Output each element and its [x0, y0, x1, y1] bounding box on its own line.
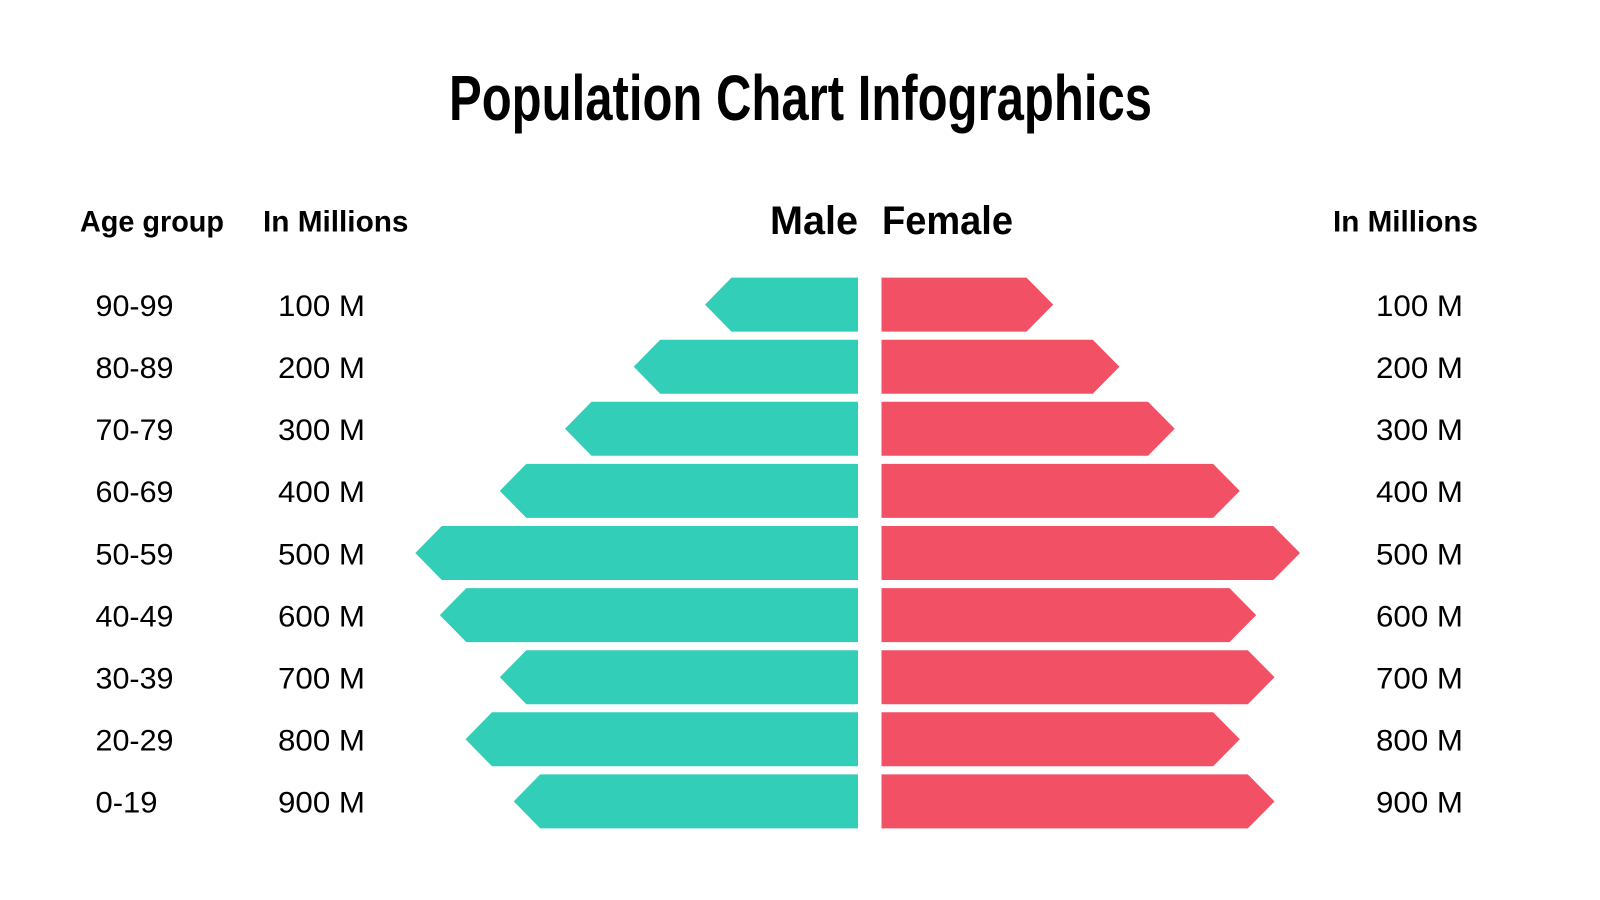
female values in millions: 700 M: [1376, 662, 1463, 696]
heading: male in millions: In Millions: [263, 206, 408, 238]
age group labels: 90-99: [96, 290, 174, 323]
female values in millions: 300 M: [1376, 414, 1463, 447]
heading: age group: Age group: [80, 206, 224, 238]
column headers: [80, 199, 1478, 243]
male values in millions: 600 M: [278, 600, 365, 634]
male values in millions: 500 M: [278, 538, 365, 572]
female values in millions: [1376, 290, 1463, 820]
male values in millions: 100 M: [278, 290, 365, 323]
male values in millions: 800 M: [278, 724, 365, 758]
age group labels: 80-89: [96, 352, 174, 385]
female values in millions: 500 M: [1376, 538, 1463, 572]
female bars: [882, 278, 1300, 828]
age group labels: 20-29: [96, 724, 174, 758]
title: Population Chart Infographics: [449, 62, 1152, 134]
female values in millions: 200 M: [1376, 352, 1463, 385]
age group labels: 30-39: [96, 662, 174, 696]
male values in millions: 300 M: [278, 414, 365, 447]
age group labels: 0-19: [96, 786, 158, 820]
heading: male: Male: [770, 199, 858, 243]
heading: female: Female: [882, 199, 1013, 243]
female values in millions: 900 M: [1376, 786, 1463, 820]
age group labels: 40-49: [96, 600, 174, 634]
male values in millions: 400 M: [278, 476, 365, 509]
male values in millions: 700 M: [278, 662, 365, 696]
age group labels: [96, 290, 174, 820]
female values in millions: 100 M: [1376, 290, 1463, 323]
heading: female in millions: In Millions: [1333, 206, 1478, 238]
age group labels: 70-79: [96, 414, 174, 447]
female values in millions: 600 M: [1376, 600, 1463, 634]
male bars: [415, 278, 858, 828]
male values in millions: [278, 290, 365, 820]
male values in millions: 200 M: [278, 352, 365, 385]
female values in millions: 400 M: [1376, 476, 1463, 509]
male values in millions: 900 M: [278, 786, 365, 820]
female values in millions: 800 M: [1376, 724, 1463, 758]
age group labels: 60-69: [96, 476, 174, 509]
age group labels: 50-59: [96, 538, 174, 572]
